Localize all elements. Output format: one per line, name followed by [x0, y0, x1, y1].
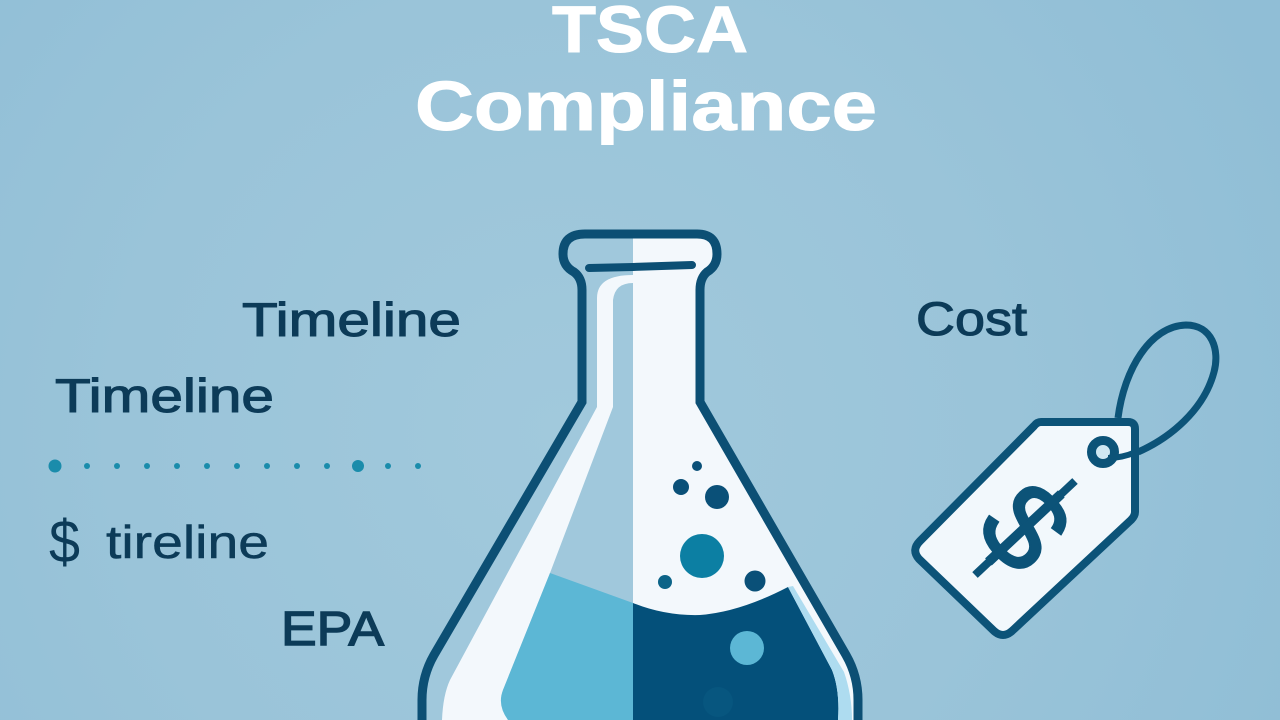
liquid: light half [501, 573, 633, 720]
label: cost: Cost [916, 292, 1027, 345]
flask interior [420, 230, 860, 720]
flask outline [422, 234, 858, 720]
right edge reflection [788, 586, 852, 720]
label: lower timeline: Timeline [55, 369, 274, 422]
tag dollar sign: $ [953, 457, 1097, 597]
label: EPA: EPA [281, 603, 384, 656]
label: upper timeline: Timeline [242, 293, 461, 346]
tag body [915, 422, 1135, 635]
flask rim line [589, 265, 692, 268]
label: dollar timeline [49, 508, 269, 575]
dotted timeline [48, 460, 421, 472]
title: Compliance [415, 67, 877, 145]
left highlight strip [442, 275, 633, 720]
label: dollar timeline: $ [49, 508, 80, 575]
tag string [1118, 325, 1216, 452]
label: dollar timeline: tireline [106, 516, 269, 568]
liquid: dark half [633, 587, 838, 720]
tag eyelet [1092, 440, 1136, 464]
icon: flask [420, 230, 860, 720]
icon: price tag [915, 325, 1216, 635]
title [415, 0, 877, 145]
bubbles [658, 461, 766, 592]
